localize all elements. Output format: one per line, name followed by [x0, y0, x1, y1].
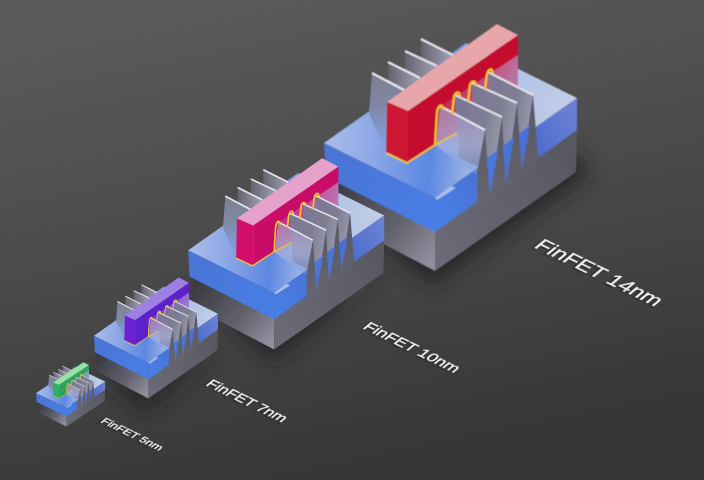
label: FinFET 14nm: FinFET 14nm	[529, 236, 668, 310]
blue oxide layer	[36, 367, 105, 416]
gate	[53, 362, 89, 398]
fin end teeth	[78, 381, 95, 410]
substrate base	[38, 389, 105, 426]
label: FinFET 5nm: FinFET 5nm	[98, 417, 166, 453]
substrate base	[193, 239, 384, 350]
front fins	[275, 195, 353, 279]
blue oxide layer	[188, 173, 384, 319]
yellow gate dielectric	[236, 193, 319, 266]
blue oxide layer	[324, 43, 577, 232]
rear fins	[48, 366, 71, 397]
gate	[236, 158, 338, 266]
yellow gate dielectric	[53, 374, 82, 398]
fin end teeth	[169, 312, 200, 367]
fin end teeth	[477, 95, 540, 206]
device: FinFET 7nm	[94, 277, 218, 398]
gate	[386, 24, 518, 163]
device: FinFET 5nm	[36, 362, 105, 426]
substrate base	[330, 128, 577, 271]
rear fins	[369, 39, 453, 158]
device: FinFET 14nm	[324, 24, 577, 271]
label: FinFET 7nm: FinFET 7nm	[202, 378, 290, 425]
front fins	[149, 301, 198, 354]
blue oxide layer	[94, 287, 218, 379]
substrate base	[97, 328, 218, 398]
label: FinFET 10nm: FinFET 10nm	[359, 320, 464, 376]
yellow gate dielectric	[124, 300, 177, 346]
front fins	[436, 72, 537, 180]
fin end teeth	[307, 213, 356, 299]
device: FinFET 10nm	[188, 158, 384, 350]
yellow gate dielectric	[386, 70, 493, 163]
gate	[124, 277, 189, 346]
front fins	[67, 375, 94, 403]
device shadows	[95, 150, 590, 412]
rear fins	[223, 170, 288, 262]
rear fins	[116, 285, 157, 343]
